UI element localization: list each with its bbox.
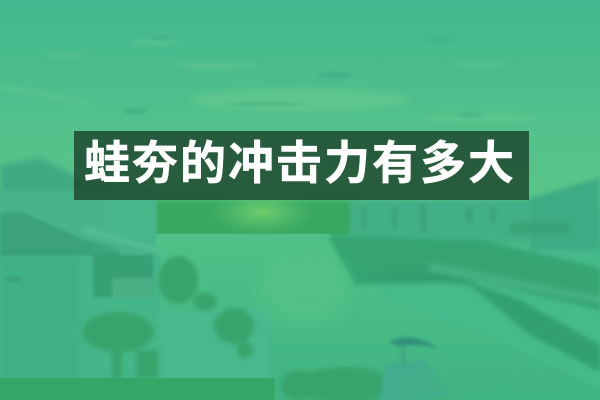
title banner <box>74 131 529 200</box>
boat <box>380 337 450 400</box>
distant hills and tree line <box>0 158 355 236</box>
sky <box>0 0 600 210</box>
left house <box>0 190 270 380</box>
far right buildings and shore <box>328 178 600 372</box>
foreground trees and lawn <box>0 256 395 400</box>
water <box>155 234 600 400</box>
title: 蛙夯的冲击力有多大 <box>84 137 516 189</box>
soft light variation <box>260 255 570 399</box>
